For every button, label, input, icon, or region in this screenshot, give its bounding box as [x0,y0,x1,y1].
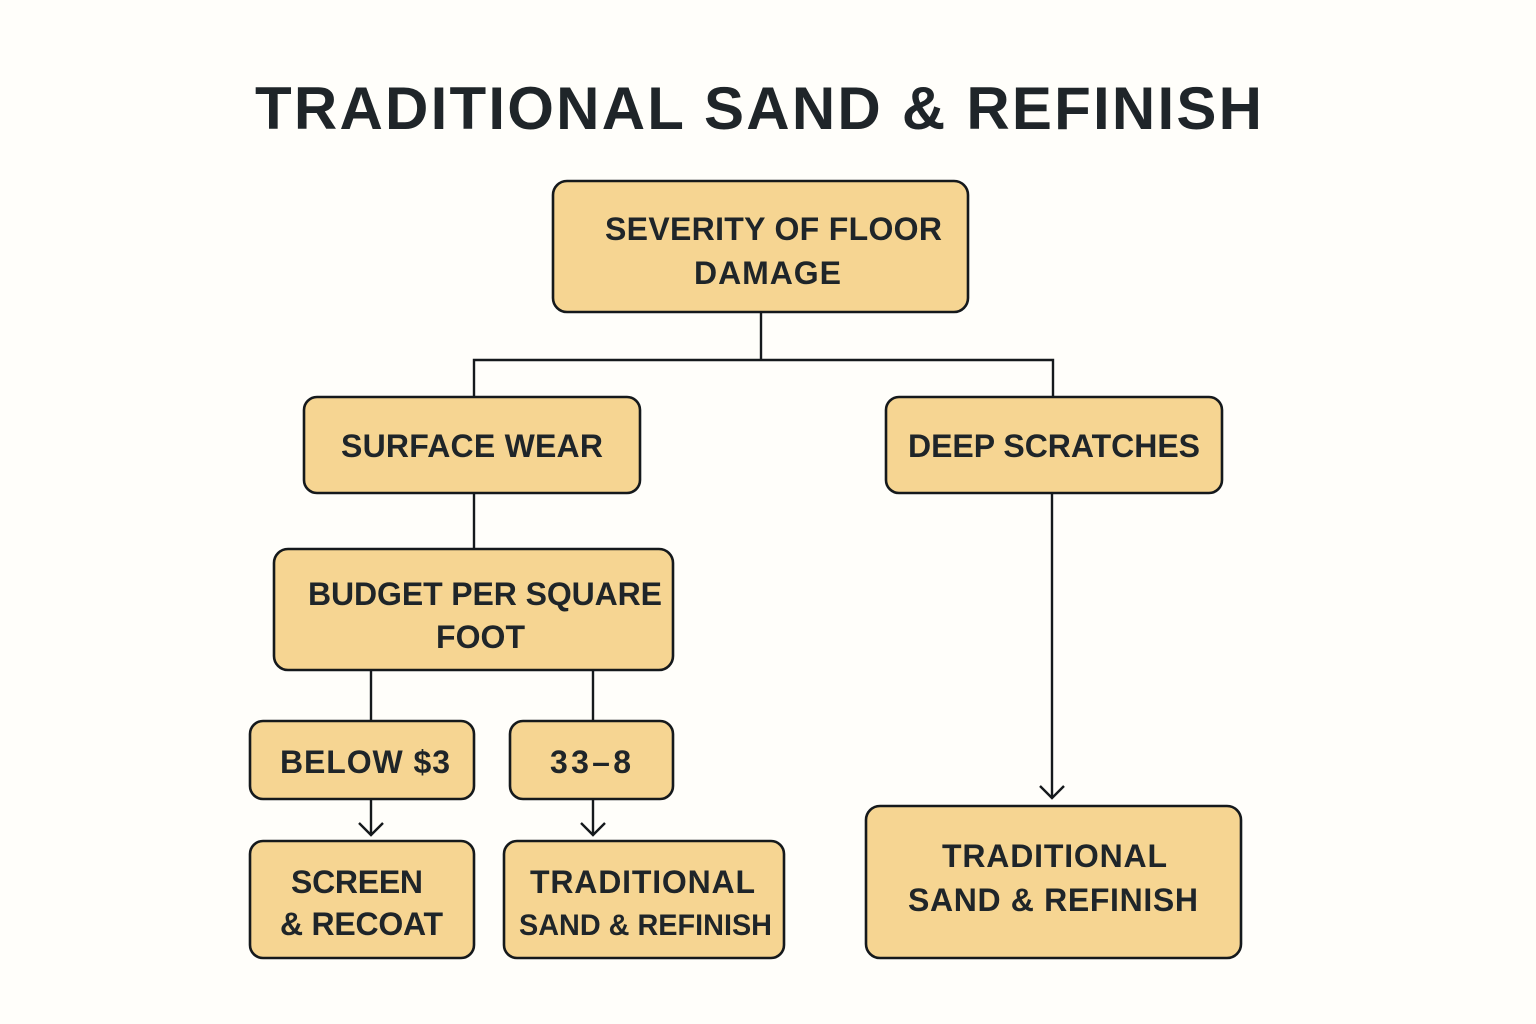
box: surface wear [304,397,640,493]
box: deep scratches [886,397,1222,493]
box: below $3 [250,721,474,799]
box: screen and recoat: SCREEN [291,864,423,900]
box: screen and recoat: & RECOAT [280,906,443,942]
box: budget per square foot: BUDGET PER SQUARE [308,576,662,612]
arrow: below $3 to screen and recoat [359,799,383,835]
box: below $3: BELOW $3 [280,744,450,780]
connector: severity to surface wear and deep scratches [474,312,1053,397]
box: severity of floor damage: DAMAGE [694,255,841,291]
box: 33-8 [510,721,673,799]
box: traditional sand and refinish (deep scratches path) [866,806,1241,958]
box: screen and recoat [250,841,474,958]
connector: budget to below $3 [370,670,372,721]
connector: budget to 33-8 [592,670,594,721]
box: traditional sand and refinish (deep scratches path): TRADITIONAL [942,838,1167,874]
box: severity of floor damage [553,181,968,312]
box: surface wear: SURFACE WEAR [341,428,603,464]
box: traditional sand and refinish (budget path): SAND & REFINISH [519,909,772,942]
box: deep scratches: DEEP SCRATCHES [908,428,1200,464]
box: severity of floor damage: SEVERITY OF FLOOR [605,211,942,247]
box: traditional sand and refinish (deep scratches path): SAND & REFINISH [908,882,1198,918]
box: 33-8: 33–8 [550,744,631,780]
box: traditional sand and refinish (budget path): TRADITIONAL [530,864,755,900]
arrow: 33-8 to traditional sand and refinish [581,799,605,835]
box: budget per square foot [274,549,673,670]
title: TRADITIONAL SAND & REFINISH [255,75,1262,142]
box: traditional sand and refinish (budget path) [504,841,784,958]
connector: surface wear to budget [473,493,475,549]
arrow: deep scratches to traditional sand and refinish [1040,493,1064,798]
box: budget per square foot: FOOT [436,619,525,655]
